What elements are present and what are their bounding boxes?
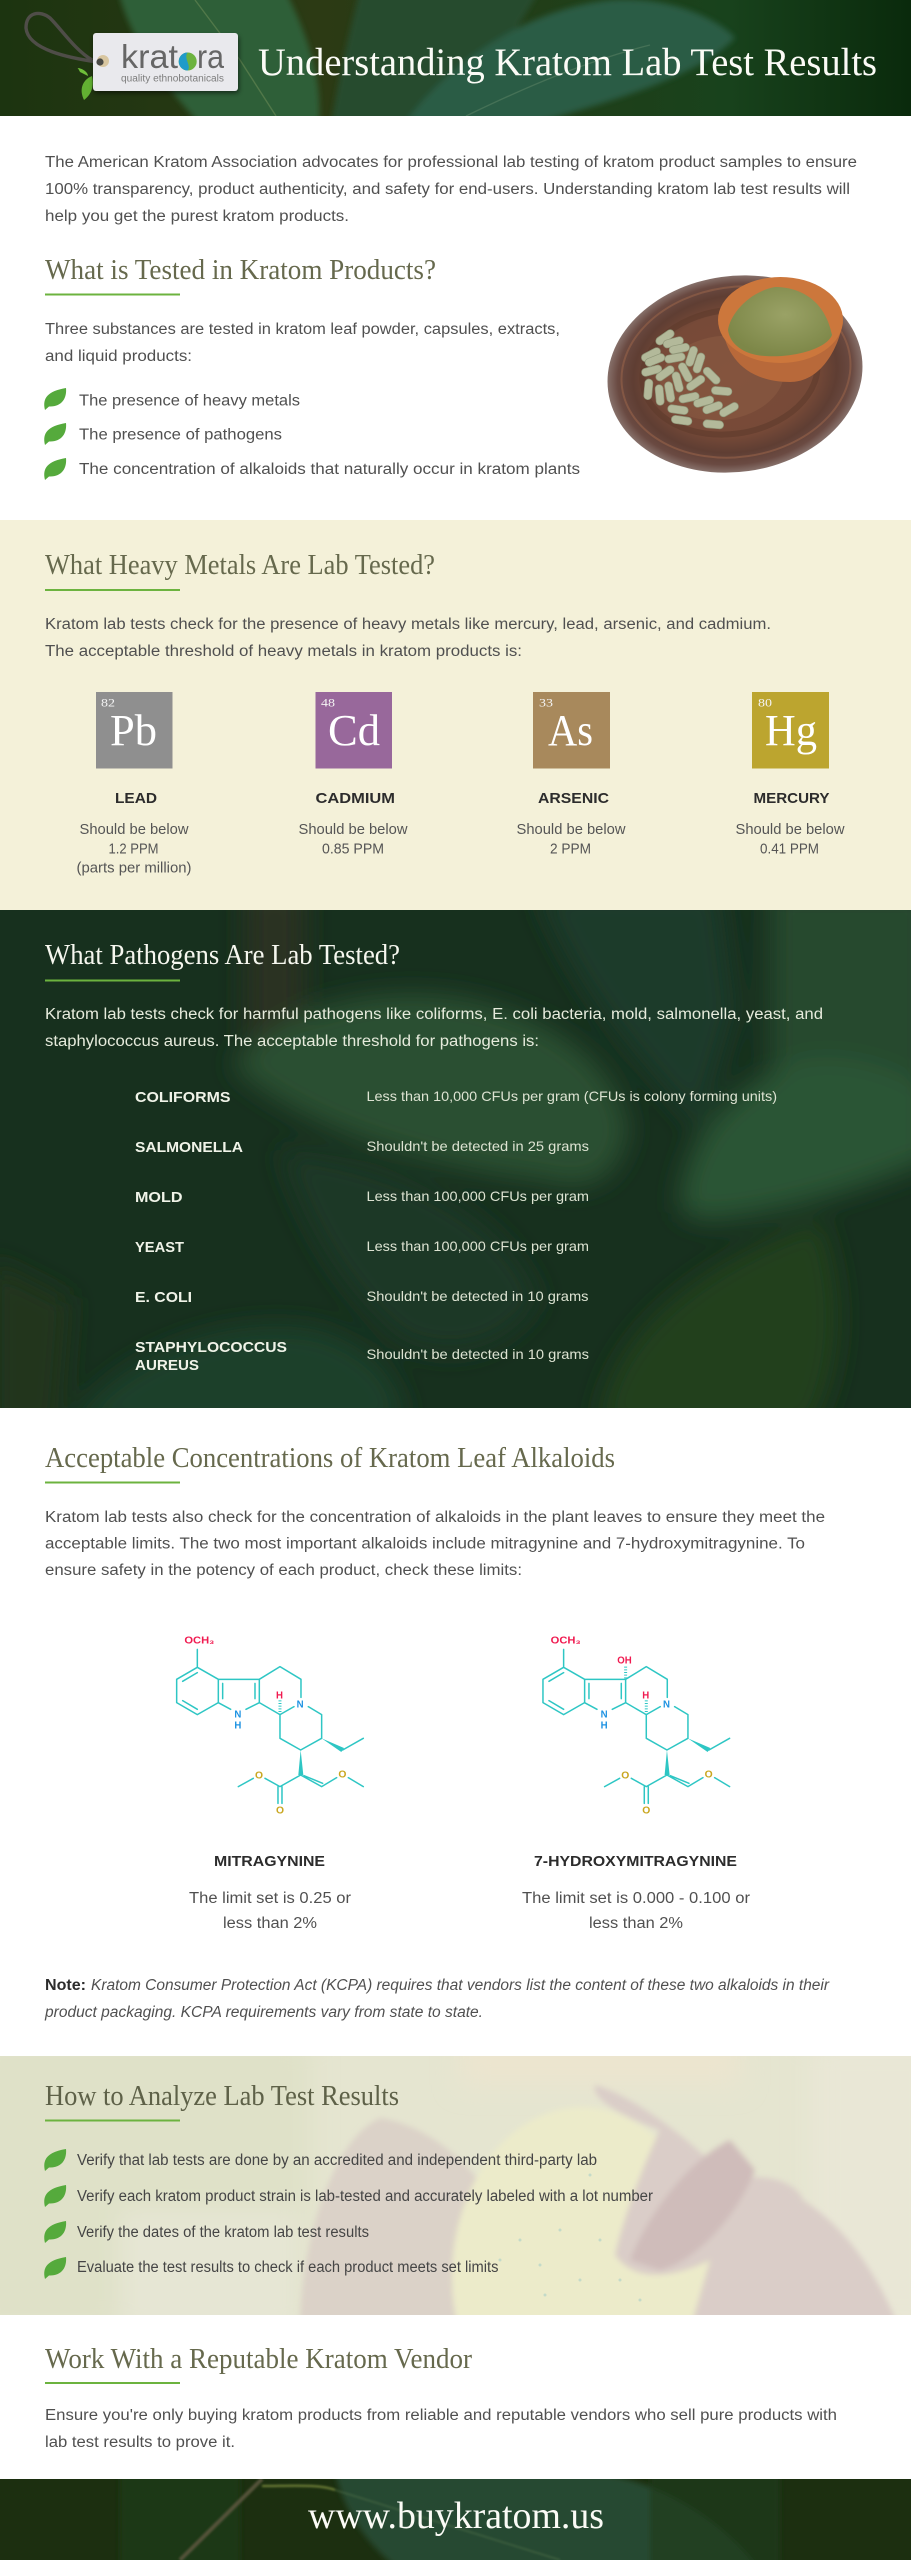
limit: 7-hydroxymitragynine: 7-HYDROXYMITRAGYNINE — [534, 1853, 737, 1870]
intro paragraph: and liquid products: — [45, 348, 192, 365]
paragraph — [45, 2407, 837, 2451]
intro paragraph: Three substances are tested in kratom leaf powder, capsules, extracts, — [45, 321, 560, 338]
chemical structure: 7-hydroxymitragynine: O — [642, 1806, 650, 1817]
bullet list: The presence of pathogens — [79, 426, 282, 444]
table of pathogen limits: Less than 100,000 CFUs per gram — [366, 1188, 589, 1204]
paragraph — [45, 616, 771, 660]
chemical structure: 7-hydroxymitragynine: H — [642, 1690, 649, 1701]
element: mercury: 0.41 PPM — [760, 840, 819, 858]
table of pathogen limits: SALMONELLA — [135, 1139, 243, 1156]
element: mercury: 80 — [758, 696, 772, 710]
element: lead: LEAD — [115, 790, 157, 807]
element: mercury: MERCURY — [754, 790, 830, 807]
heading: What Pathogens Are Lab Tested? — [45, 939, 400, 971]
table of pathogen limits: COLIFORMS — [135, 1089, 230, 1106]
checklist: Verify that lab tests are done by an accredited and independent third-party lab — [77, 2152, 597, 2169]
chemical structure: mitragynine: N — [297, 1700, 304, 1711]
table of pathogen limits: Less than 10,000 CFUs per gram (CFUs is colony forming units) — [366, 1088, 777, 1104]
table of pathogen limits: STAPHYLOCOCCUS — [135, 1339, 287, 1356]
element: mercury: Hg — [765, 706, 817, 755]
intro text block: 100% transparency, product authenticity, and safety for end-users. Understanding kratom lab test results will — [45, 181, 850, 198]
element: lead: 82 — [101, 696, 115, 710]
limit: mitragynine — [189, 1853, 351, 1932]
element: arsenic: ARSENIC — [538, 790, 609, 807]
title: Understanding Kratom Lab Test Results — [258, 41, 877, 84]
chemical structure: 7-hydroxymitragynine: H — [601, 1721, 608, 1732]
table of pathogen limits: AUREUS — [135, 1357, 199, 1374]
bullet list: The presence of heavy metals — [79, 392, 300, 410]
chemical structure: mitragynine: O — [276, 1806, 284, 1817]
website address: www.buykratom.us — [308, 2495, 604, 2537]
intro paragraph — [45, 321, 560, 365]
table of pathogen limits: MOLD — [135, 1189, 183, 1206]
paragraph: Kratom lab tests also check for the concentration of alkaloids in the plant leaves to ensure they meet the — [45, 1509, 825, 1526]
paragraph: Ensure you're only buying kratom products from reliable and reputable vendors who sell pure products with — [45, 2407, 837, 2424]
element: lead — [76, 692, 192, 876]
chemical structure: 7-hydroxymitragynine: O — [705, 1770, 713, 1781]
limit: mitragynine: MITRAGYNINE — [214, 1853, 325, 1870]
intro text block — [45, 154, 857, 225]
limit: mitragynine: The limit set is 0.25 or — [189, 1890, 351, 1907]
element: cadmium: 48 — [321, 696, 335, 710]
chemical structure: 7-hydroxymitragynine: OCH₃ — [551, 1635, 581, 1646]
chemical structure: mitragynine: OCH₃ — [184, 1635, 214, 1646]
paragraph — [45, 1006, 823, 1050]
chemical structure: mitragynine: O — [255, 1770, 263, 1781]
panel: what is tested — [44, 254, 875, 489]
chemical structure: 7-hydroxymitragynine: N — [663, 1700, 670, 1711]
chemical structure: mitragynine: N — [234, 1710, 241, 1721]
heading: What is Tested in Kratom Products? — [45, 254, 436, 286]
panel: pathogens — [0, 890, 911, 1430]
element: lead: (parts per million) — [76, 860, 192, 876]
element: arsenic: Should be below — [516, 821, 626, 838]
chemical structure: mitragynine — [177, 1635, 363, 1817]
bullet list — [44, 388, 580, 480]
table of pathogen limits: E. COLI — [135, 1289, 192, 1306]
footer banner — [0, 2470, 911, 2560]
note: Kratom Consumer Protection Act (KCPA) requires that vendors list the content of these two alkaloids in their — [91, 1977, 830, 1994]
bullet list: The concentration of alkaloids that naturally occur in kratom plants — [79, 461, 580, 478]
element: mercury — [736, 692, 845, 858]
limit: mitragynine: less than 2% — [223, 1915, 317, 1932]
element: arsenic: 2 PPM — [550, 840, 591, 858]
checklist — [44, 2149, 653, 2279]
chemical structure: mitragynine: H — [276, 1690, 283, 1701]
table of pathogen limits: Less than 100,000 CFUs per gram — [366, 1238, 589, 1254]
limit: 7-hydroxymitragynine: The limit set is 0.000 - 0.100 or — [522, 1890, 750, 1907]
logo tag — [26, 13, 239, 100]
chemical structure: mitragynine: H — [234, 1721, 241, 1732]
element: arsenic: 33 — [539, 696, 553, 710]
panel: reputable vendor — [45, 2343, 837, 2451]
limit: 7-hydroxymitragynine — [522, 1853, 750, 1932]
element: arsenic: As — [548, 706, 593, 755]
checklist: Verify the dates of the kratom lab test results — [77, 2224, 369, 2241]
heading: How to Analyze Lab Test Results — [45, 2080, 399, 2112]
element: cadmium: CADMIUM — [316, 790, 395, 807]
paragraph: Kratom lab tests check for harmful pathogens like coliforms, E. coli bacteria, mold, salmonella, yeast, and — [45, 1006, 823, 1023]
intro text block: The American Kratom Association advocates for professional lab testing of kratom product samples to ensure — [45, 154, 857, 171]
logo tag: krat — [121, 38, 178, 75]
element: mercury: Should be below — [736, 821, 845, 838]
chemical structure: 7-hydroxymitragynine: N — [601, 1710, 608, 1721]
note: Note: — [45, 1977, 86, 1994]
table of pathogen limits — [135, 1088, 777, 1374]
limit: 7-hydroxymitragynine: less than 2% — [589, 1915, 683, 1932]
element: arsenic — [516, 692, 626, 858]
checklist: Evaluate the test results to check if each product meets set limits — [77, 2259, 499, 2276]
intro text block: help you get the purest kratom products. — [45, 208, 349, 225]
heading: What Heavy Metals Are Lab Tested? — [45, 549, 435, 581]
table of pathogen limits: Shouldn't be detected in 10 grams — [366, 1346, 589, 1362]
paragraph: ensure safety in the potency of each product, check these limits: — [45, 1562, 522, 1579]
image: plate with capsules and powder — [595, 259, 875, 489]
panel: how to analyze — [0, 2030, 911, 2447]
header banner — [0, 0, 911, 130]
table of pathogen limits: Shouldn't be detected in 25 grams — [366, 1138, 589, 1154]
panel: alkaloids — [44, 1442, 830, 2021]
logo tag: ra — [197, 38, 225, 75]
element: cadmium — [298, 692, 408, 858]
note: product packaging. KCPA requirements vary from state to state. — [44, 2004, 483, 2021]
paragraph — [45, 1509, 825, 1579]
paragraph: acceptable limits. The two most important alkaloids include mitragynine and 7-hydroxymitragynine. To — [45, 1536, 805, 1552]
checklist: Verify each kratom product strain is lab-tested and accurately labeled with a lot number — [77, 2188, 653, 2205]
paragraph: The acceptable threshold of heavy metals in kratom products is: — [45, 643, 522, 660]
chemical structure: 7-hydroxymitragynine: OH — [617, 1655, 632, 1666]
heading: Acceptable Concentrations of Kratom Leaf Alkaloids — [45, 1442, 615, 1474]
element: cadmium: Cd — [328, 706, 380, 755]
logo tag: quality ethnobotanicals — [121, 74, 224, 84]
heading: Work With a Reputable Kratom Vendor — [45, 2343, 472, 2375]
panel: heavy metals — [0, 520, 911, 910]
element: cadmium: 0.85 PPM — [322, 840, 384, 858]
paragraph: lab test results to prove it. — [45, 2434, 235, 2451]
element: lead: Should be below — [80, 821, 189, 838]
table of pathogen limits: YEAST — [135, 1239, 184, 1256]
paragraph: staphylococcus aureus. The acceptable threshold for pathogens is: — [45, 1033, 539, 1050]
element: cadmium: Should be below — [298, 821, 408, 838]
chemical structure: 7-hydroxymitragynine: O — [621, 1770, 629, 1781]
chemical structure: 7-hydroxymitragynine — [543, 1635, 730, 1817]
paragraph: Kratom lab tests check for the presence of heavy metals like mercury, lead, arsenic, and cadmium. — [45, 616, 771, 633]
note — [44, 1977, 830, 2021]
element: lead: Pb — [110, 706, 157, 755]
chemical structure: mitragynine: O — [338, 1770, 346, 1781]
element: lead: 1.2 PPM — [108, 840, 158, 858]
table of pathogen limits: Shouldn't be detected in 10 grams — [366, 1288, 588, 1304]
